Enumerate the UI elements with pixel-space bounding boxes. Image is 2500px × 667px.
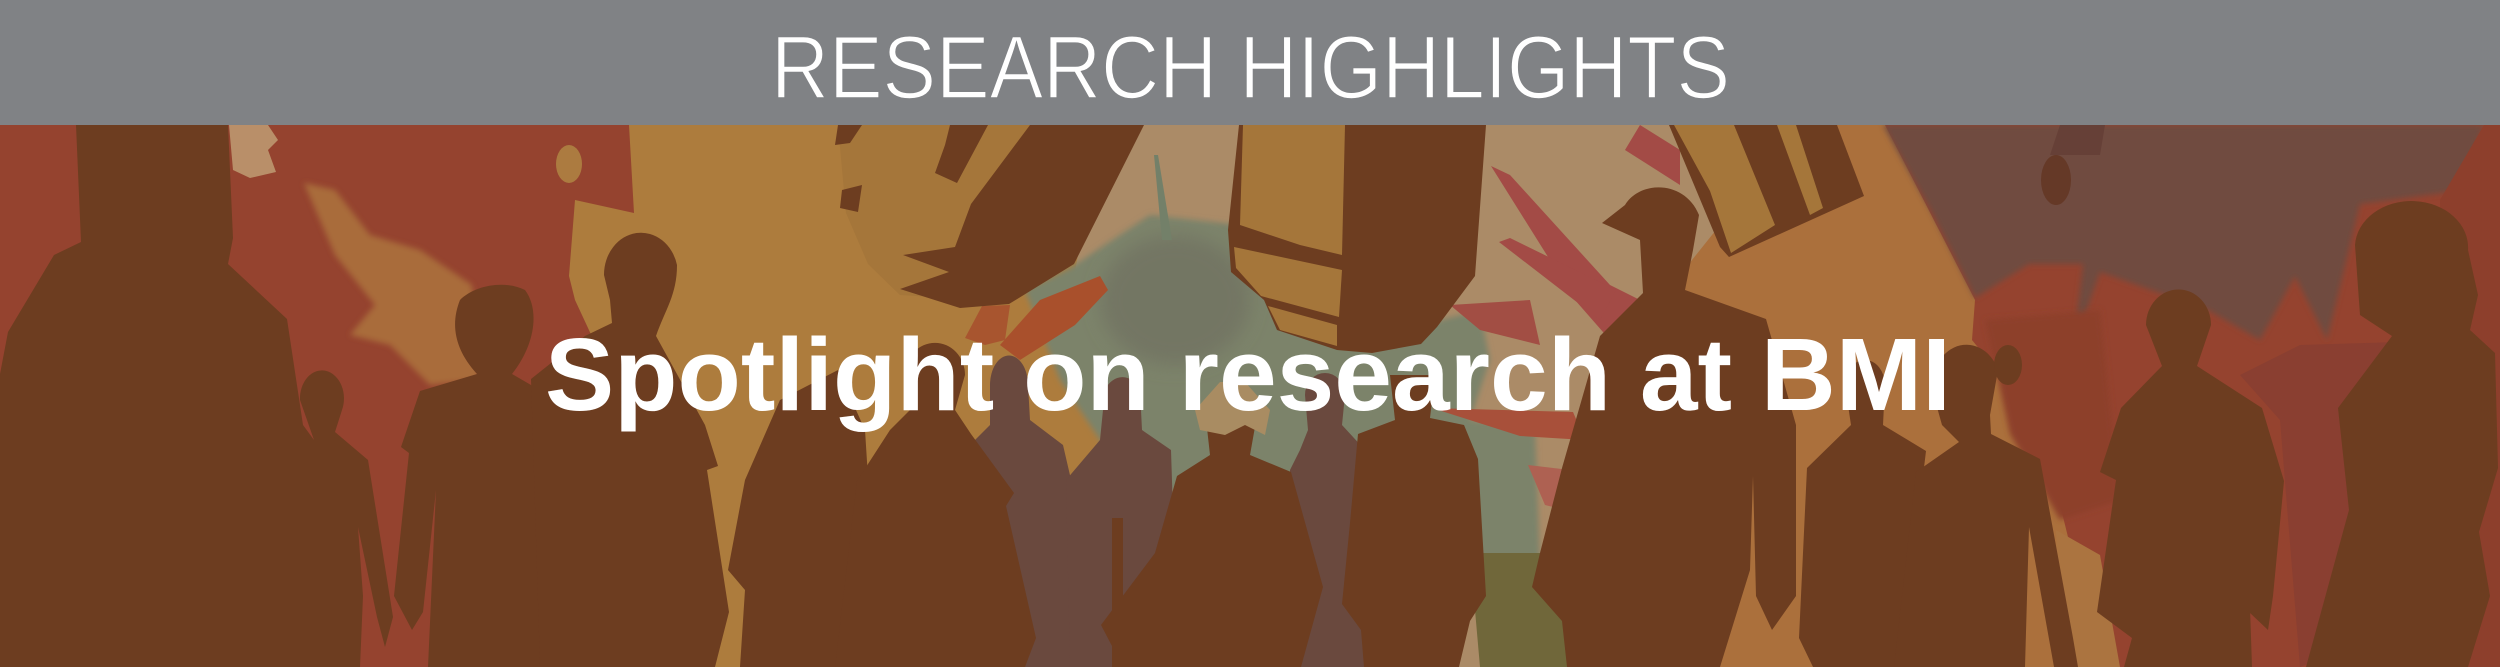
tan centre panel (1060, 125, 1800, 667)
orange paint area right (1660, 125, 2100, 667)
person: under spotlight left (728, 370, 880, 667)
person: woman in tee (835, 343, 1036, 667)
header bar (0, 0, 2500, 125)
person: woman with bun (1894, 345, 2078, 667)
person: tall man (531, 233, 729, 667)
person: far right woman (2306, 201, 2498, 667)
orange flare (1000, 276, 1108, 360)
red streaks (1491, 166, 1640, 340)
top hanging objects (835, 125, 1864, 353)
background crowd silhouettes (975, 355, 1375, 667)
left bottle (835, 125, 1144, 308)
back person 2 (1066, 377, 1178, 667)
person: figure behind woman (1799, 360, 1926, 667)
person: large hooded figure (0, 125, 393, 667)
person: curly hair (394, 285, 600, 667)
person: man with cap (1532, 187, 1796, 667)
heading: research highlights: RESEARCH HIGHLIGHTS (771, 17, 1730, 117)
back person 1 (975, 355, 1090, 667)
back person 3 (1290, 373, 1375, 667)
person: man at centre right (1342, 375, 1486, 667)
purple paint area (1883, 125, 2484, 349)
left brush stroke (304, 183, 480, 385)
centre bottle (1228, 125, 1486, 353)
subtitle: spotlight on research: Spotlight on research at BMI (545, 317, 1951, 432)
right bottle (1669, 125, 1864, 257)
person: man right (2097, 289, 2284, 667)
person: centre with hair (1101, 382, 1323, 667)
olive paint lower centre (1470, 553, 1600, 667)
sage wash (1025, 215, 1540, 560)
ochre paint area (569, 125, 1140, 667)
